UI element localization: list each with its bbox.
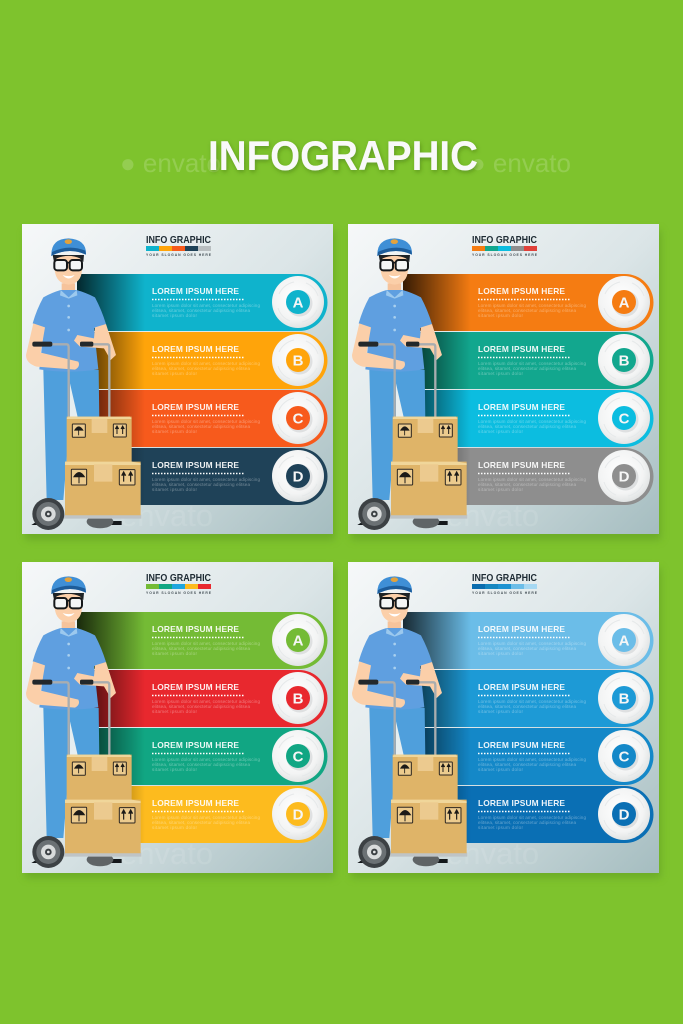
band B: Lorem ipsum dolor sit amet, consectetur adipiscing [152, 361, 260, 366]
header: INFO GRAPHIC [472, 573, 537, 584]
header [472, 573, 538, 595]
band B: sitamet ipsum dolor [152, 709, 197, 714]
band D: elitsea, sitamet, consectetur adipiscing elitsea [152, 482, 250, 487]
band A: Lorem ipsum dolor sit amet, consectetur adipiscing [478, 303, 586, 308]
band D: LOREM IPSUM HERE [478, 798, 565, 808]
band C: sitamet ipsum dolor [152, 429, 197, 434]
band A [77, 274, 328, 331]
title: INFOGRAPHIC [208, 132, 478, 179]
band A: sitamet ipsum dolor [478, 313, 523, 318]
band A [77, 612, 328, 669]
header: INFO GRAPHIC [146, 235, 211, 246]
band A: Lorem ipsum dolor sit amet, consectetur adipiscing [152, 641, 260, 646]
band D: LOREM IPSUM HERE [478, 460, 565, 470]
watermark: envato [120, 836, 213, 871]
band D: Lorem ipsum dolor sit amet, consectetur adipiscing [152, 815, 260, 820]
band D [77, 448, 328, 505]
band D: LOREM IPSUM HERE [152, 798, 239, 808]
band A: Lorem ipsum dolor sit amet, consectetur adipiscing [152, 303, 260, 308]
band C: LOREM IPSUM HERE [478, 402, 565, 412]
band C [403, 390, 654, 447]
band C: LOREM IPSUM HERE [478, 740, 565, 750]
panel: teal-orange-red-navy version (top left) [22, 224, 335, 540]
band B: elitsea, sitamet, consectetur adipiscing elitsea [152, 704, 250, 709]
band B: Lorem ipsum dolor sit amet, consectetur adipiscing [478, 699, 586, 704]
band A: A [619, 632, 630, 650]
band D: D [293, 468, 304, 486]
band B: B [293, 690, 304, 708]
band D: Lorem ipsum dolor sit amet, consectetur adipiscing [478, 477, 586, 482]
header [146, 573, 212, 595]
band D: sitamet ipsum dolor [152, 487, 197, 492]
band C [77, 728, 328, 785]
band C: C [619, 748, 630, 766]
band C [403, 728, 654, 785]
band A: sitamet ipsum dolor [478, 651, 523, 656]
band D: D [619, 806, 630, 824]
header: INFO GRAPHIC [146, 573, 211, 584]
band B: elitsea, sitamet, consectetur adipiscing elitsea [478, 366, 576, 371]
panel: orange-green-cyan-grey version (top right) [348, 224, 661, 540]
watermark: envato right: ● envato [470, 148, 571, 178]
band D: elitsea, sitamet, consectetur adipiscing elitsea [478, 820, 576, 825]
band A: elitsea, sitamet, consectetur adipiscing elitsea [478, 308, 576, 313]
band C: elitsea, sitamet, consectetur adipiscing elitsea [478, 424, 576, 429]
band A: sitamet ipsum dolor [152, 651, 197, 656]
band D: elitsea, sitamet, consectetur adipiscing elitsea [152, 820, 250, 825]
band A: elitsea, sitamet, consectetur adipiscing elitsea [152, 646, 250, 651]
band B [77, 670, 328, 727]
band B [403, 670, 654, 727]
panel: blue version (bottom right) [348, 562, 661, 878]
delivery man with hand truck and boxes [26, 238, 141, 530]
band A: LOREM IPSUM HERE [478, 624, 565, 634]
band B: LOREM IPSUM HERE [478, 344, 565, 354]
band A: LOREM IPSUM HERE [478, 286, 565, 296]
band B: LOREM IPSUM HERE [152, 682, 239, 692]
band A [403, 612, 654, 669]
band C: elitsea, sitamet, consectetur adipiscing elitsea [478, 762, 576, 767]
band B: sitamet ipsum dolor [478, 371, 523, 376]
band A: elitsea, sitamet, consectetur adipiscing elitsea [152, 308, 250, 313]
band D: sitamet ipsum dolor [478, 487, 523, 492]
band B: Lorem ipsum dolor sit amet, consectetur adipiscing [152, 699, 260, 704]
band D [403, 786, 654, 843]
header [472, 235, 538, 257]
band D [77, 786, 328, 843]
band B: B [293, 352, 304, 370]
band C: sitamet ipsum dolor [478, 429, 523, 434]
band C: LOREM IPSUM HERE [152, 740, 239, 750]
band B: B [619, 690, 630, 708]
band B: LOREM IPSUM HERE [478, 682, 565, 692]
band D: Lorem ipsum dolor sit amet, consectetur adipiscing [152, 477, 260, 482]
header: YOUR SLOGAN GOES HERE [472, 591, 538, 595]
band A [403, 274, 654, 331]
band C: elitsea, sitamet, consectetur adipiscing elitsea [152, 762, 250, 767]
header: YOUR SLOGAN GOES HERE [146, 253, 212, 257]
band A: LOREM IPSUM HERE [152, 286, 239, 296]
band A: A [293, 294, 304, 312]
band C: Lorem ipsum dolor sit amet, consectetur adipiscing [478, 419, 586, 424]
watermark: envato left: ● envato [120, 148, 221, 178]
watermark: envato [446, 498, 539, 533]
band C [77, 390, 328, 447]
band B [403, 332, 654, 389]
panel: green-red-teal-yellow version (bottom left) [22, 562, 335, 878]
band B: elitsea, sitamet, consectetur adipiscing elitsea [478, 704, 576, 709]
band D: LOREM IPSUM HERE [152, 460, 239, 470]
band A: Lorem ipsum dolor sit amet, consectetur adipiscing [478, 641, 586, 646]
band D [403, 448, 654, 505]
delivery man with hand truck and boxes [352, 238, 467, 530]
band C: elitsea, sitamet, consectetur adipiscing elitsea [152, 424, 250, 429]
header: YOUR SLOGAN GOES HERE [472, 253, 538, 257]
band D: Lorem ipsum dolor sit amet, consectetur adipiscing [478, 815, 586, 820]
band C: Lorem ipsum dolor sit amet, consectetur adipiscing [152, 419, 260, 424]
band C: sitamet ipsum dolor [478, 767, 523, 772]
band A: LOREM IPSUM HERE [152, 624, 239, 634]
band A: A [619, 294, 630, 312]
band D: D [619, 468, 630, 486]
header: INFO GRAPHIC [472, 235, 537, 246]
watermark: envato [446, 836, 539, 871]
band B: elitsea, sitamet, consectetur adipiscing elitsea [152, 366, 250, 371]
band B: sitamet ipsum dolor [478, 709, 523, 714]
band D: sitamet ipsum dolor [152, 825, 197, 830]
delivery man with hand truck and boxes [352, 576, 467, 868]
band A: elitsea, sitamet, consectetur adipiscing elitsea [478, 646, 576, 651]
watermark: envato [120, 498, 213, 533]
band B: sitamet ipsum dolor [152, 371, 197, 376]
band B [77, 332, 328, 389]
band D: D [293, 806, 304, 824]
band C: Lorem ipsum dolor sit amet, consectetur adipiscing [478, 757, 586, 762]
delivery man with hand truck and boxes [26, 576, 141, 868]
band D: elitsea, sitamet, consectetur adipiscing elitsea [478, 482, 576, 487]
header [146, 235, 212, 257]
band C: C [293, 410, 304, 428]
band B: B [619, 352, 630, 370]
band C: LOREM IPSUM HERE [152, 402, 239, 412]
band C: sitamet ipsum dolor [152, 767, 197, 772]
band C: C [293, 748, 304, 766]
band C: Lorem ipsum dolor sit amet, consectetur adipiscing [152, 757, 260, 762]
band A: sitamet ipsum dolor [152, 313, 197, 318]
band C: C [619, 410, 630, 428]
band A: A [293, 632, 304, 650]
band B: Lorem ipsum dolor sit amet, consectetur adipiscing [478, 361, 586, 366]
band D: sitamet ipsum dolor [478, 825, 523, 830]
header: YOUR SLOGAN GOES HERE [146, 591, 212, 595]
band B: LOREM IPSUM HERE [152, 344, 239, 354]
